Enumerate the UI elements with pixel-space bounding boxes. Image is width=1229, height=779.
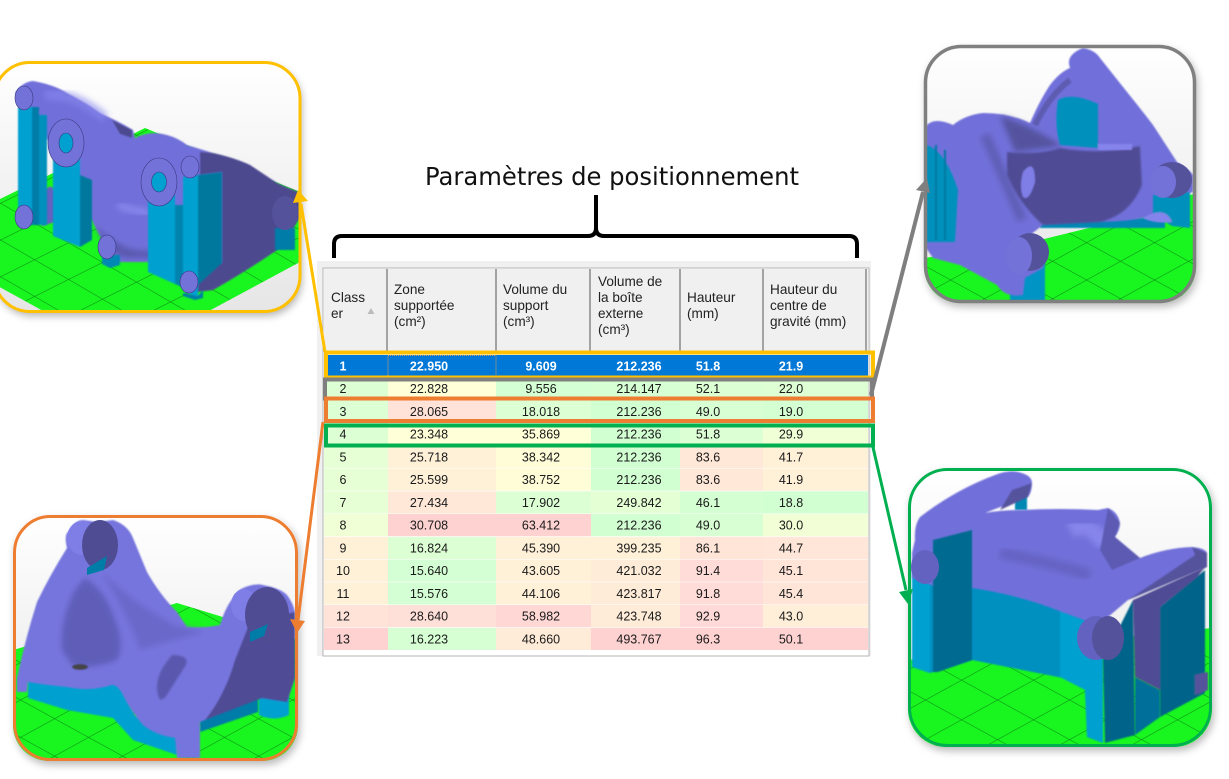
body [17, 520, 295, 758]
row 7: 17.902 [522, 496, 560, 510]
supports [28, 678, 289, 755]
build plate [924, 193, 1196, 305]
row 11: 91.8 [696, 587, 720, 601]
row 1: 21.9 [779, 360, 803, 374]
supports [18, 107, 295, 300]
row 12: 28.640 [410, 610, 448, 624]
row 4: 4 [340, 428, 347, 442]
row 1: 9.609 [525, 360, 557, 374]
table header: Hauteur du [770, 282, 837, 297]
row 7: 46.1 [696, 496, 720, 510]
highlight: row 3 outline [326, 398, 873, 421]
bosses [1018, 162, 1192, 271]
row 2: 22.0 [779, 382, 803, 396]
row 9: 399.235 [616, 542, 662, 556]
body [15, 81, 300, 293]
row 10: 45.1 [779, 564, 803, 578]
row 13: 16.223 [410, 632, 448, 646]
row 10: 15.640 [410, 564, 448, 578]
row 13: 493.767 [616, 632, 662, 646]
row 8: 8 [340, 519, 347, 533]
table header: (cm³) [598, 322, 630, 337]
row 9 [324, 537, 868, 559]
row 2: 52.1 [696, 382, 720, 396]
row 4: 35.869 [522, 428, 560, 442]
row 13: 50.1 [779, 632, 803, 646]
row 5: 25.718 [410, 450, 448, 464]
row 4: 212.236 [616, 428, 662, 442]
table header: la boîte [598, 290, 643, 305]
highlight: row 1 outline [326, 352, 873, 378]
table header: gravité (mm) [770, 314, 846, 329]
row 9: 44.7 [779, 542, 803, 556]
row 13 [324, 628, 868, 650]
row 6: 6 [340, 473, 347, 487]
row 6 [324, 468, 868, 491]
row 3: 49.0 [696, 405, 720, 419]
title: Paramètres de positionnement [425, 162, 799, 191]
bosses [67, 520, 289, 643]
row 11: 44.106 [522, 587, 560, 601]
row 4: 29.9 [779, 428, 803, 442]
arrow: gray [871, 178, 930, 395]
row 1: 51.8 [696, 360, 720, 374]
row 11 [324, 582, 868, 604]
row 10: 10 [336, 564, 350, 578]
table header: Volume du [503, 282, 567, 297]
table header: externe [598, 306, 643, 321]
build plate [908, 628, 1212, 748]
build plate [0, 128, 300, 312]
bosses [15, 86, 199, 293]
row 12 [324, 605, 868, 627]
row 9: 86.1 [696, 542, 720, 556]
row 4: 51.8 [696, 428, 720, 442]
row 3: 3 [340, 405, 347, 419]
row 1: 212.236 [616, 360, 662, 374]
row 8: 212.236 [616, 519, 662, 533]
row 7: 7 [340, 496, 347, 510]
body [912, 471, 1207, 623]
row 11: 15.576 [410, 587, 448, 601]
panel: results table [317, 261, 871, 656]
row 4 [324, 423, 868, 445]
bosses [911, 550, 1124, 660]
row 2: 22.828 [410, 382, 448, 396]
table header: Volume de [598, 274, 662, 289]
table header: er [331, 306, 344, 321]
table header: supportée [394, 298, 454, 313]
row 6: 83.6 [696, 473, 720, 487]
row 7: 27.434 [410, 496, 448, 510]
highlight: row 4 outline [326, 426, 873, 446]
row 13: 48.660 [522, 632, 560, 646]
table header: Class [331, 290, 365, 305]
build plate [13, 603, 298, 762]
supports behind body [912, 490, 1160, 743]
row 7 [324, 491, 868, 514]
row 8: 49.0 [696, 519, 720, 533]
row 7: 249.842 [616, 496, 662, 510]
row 12: 12 [336, 610, 350, 624]
table header: Zone [394, 282, 425, 297]
row 9: 9 [340, 542, 347, 556]
row 12: 423.748 [616, 610, 662, 624]
row 9: 16.824 [410, 542, 448, 556]
row 4: 23.348 [410, 428, 448, 442]
supports in front [926, 97, 1190, 242]
panel: gray render, rank 2 [924, 45, 1198, 307]
row 6: 38.752 [522, 473, 560, 487]
row 13: 96.3 [696, 632, 720, 646]
table header: support [503, 298, 549, 313]
panel: yellow render, rank 1 [0, 62, 302, 316]
row 8 [324, 514, 868, 536]
row 5: 41.7 [779, 450, 803, 464]
arrow: yellow [293, 190, 325, 352]
table header: Hauteur [687, 290, 736, 305]
arrow: green [872, 443, 913, 604]
panel: green render, rank 4 [908, 468, 1214, 751]
row 10: 91.4 [696, 564, 720, 578]
row 10: 421.032 [616, 564, 662, 578]
table header: centre de [770, 298, 827, 313]
row 5: 83.6 [696, 450, 720, 464]
panel: orange render, rank 3 [13, 515, 300, 765]
row 5: 38.342 [522, 450, 560, 464]
row 12: 92.9 [696, 610, 720, 624]
row 11: 423.817 [616, 587, 662, 601]
table header [324, 269, 868, 354]
row 2: 2 [340, 382, 347, 396]
row 1: 22.950 [410, 360, 448, 374]
row 13: 13 [336, 632, 350, 646]
highlight: row 2 outline [325, 380, 872, 398]
row 2: 214.147 [616, 382, 662, 396]
row 8: 63.412 [522, 519, 560, 533]
row 1: 1 [340, 360, 347, 374]
row 2 [324, 378, 868, 400]
table header: (cm³) [503, 314, 535, 329]
row 9: 45.390 [522, 542, 560, 556]
row 3: 212.236 [616, 405, 662, 419]
bracket [334, 195, 857, 258]
supports in front [933, 530, 1208, 743]
row 6: 212.236 [616, 473, 662, 487]
row 8: 30.708 [410, 519, 448, 533]
row 3: 19.0 [779, 405, 803, 419]
row 3 [324, 400, 868, 422]
row 3: 28.065 [410, 405, 448, 419]
row 1 [324, 355, 868, 377]
row 5: 212.236 [616, 450, 662, 464]
row 3: 18.018 [522, 405, 560, 419]
row 11: 11 [337, 587, 350, 601]
row 8: 30.0 [779, 519, 803, 533]
row 5: 5 [340, 450, 347, 464]
row 10 [324, 560, 868, 582]
table header: (cm²) [394, 314, 426, 329]
arrow: orange [290, 422, 323, 633]
row 7: 18.8 [779, 496, 803, 510]
row 6: 25.599 [410, 473, 448, 487]
supports behind [1010, 218, 1165, 302]
row 11: 45.4 [779, 587, 803, 601]
row 2: 9.556 [525, 382, 557, 396]
row 10: 43.605 [522, 564, 560, 578]
row 12: 58.982 [522, 610, 560, 624]
row 12: 43.0 [779, 610, 803, 624]
body [924, 48, 1193, 296]
row 6: 41.9 [779, 473, 803, 487]
table header: (mm) [687, 306, 719, 321]
row 5 [324, 446, 868, 468]
